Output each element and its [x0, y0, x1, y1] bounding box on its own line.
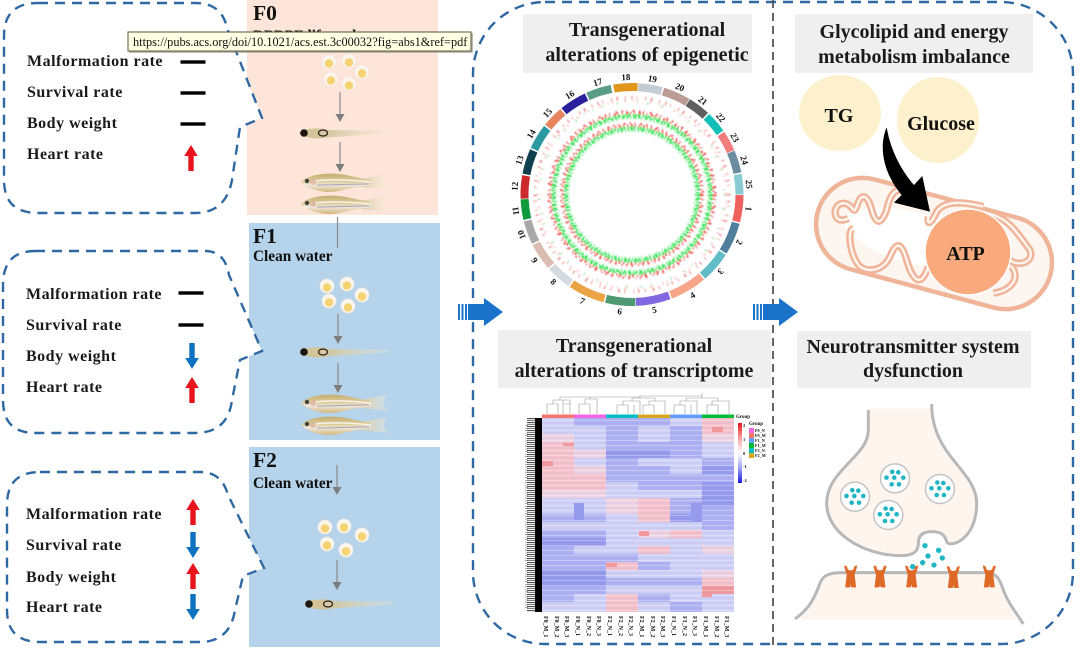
heatmap legend: F2_M: [755, 453, 766, 458]
sample labels: [542, 616, 729, 637]
callout: F0 phenotypes: Malformation rate: [27, 53, 163, 70]
heading: glycolipid: metabolism imbalance: [818, 46, 1010, 68]
sample labels: F0_N_3: [595, 616, 601, 636]
chromosome labels: 20: [674, 81, 686, 94]
chromosome labels: 3: [715, 267, 726, 277]
sample labels: F2_N_2: [617, 616, 623, 636]
inner methylation track: [561, 124, 703, 266]
sample labels: F0_N_2: [585, 616, 591, 636]
heatmap legend: F0_M: [755, 433, 766, 438]
tooltip: URL: https://pubs.acs.org/doi/10.1021/acs.est.3c00032?fig=abs1&ref=pdf: [133, 35, 468, 49]
callout: F2 phenotypes: Heart rate: [26, 599, 103, 616]
heatmap legend: [736, 415, 766, 483]
callout: F1 phenotypes: Malformation rate: [26, 286, 162, 303]
chromosome labels: 25: [744, 179, 754, 190]
heading: glycolipid: [795, 14, 1033, 73]
arrow: generations to epigenetic/transcriptome: [458, 298, 503, 326]
panel: large molecular outcomes container: [473, 2, 1073, 644]
heading: F0: F0: [253, 1, 277, 25]
icon: F2 larva: [304, 599, 393, 609]
middle methylation track: [548, 111, 716, 278]
heatmap legend: F1_N: [755, 438, 765, 443]
chromosome ring: [480, 42, 784, 347]
panel: F0 generation: [247, 0, 438, 215]
postsynaptic membrane: [795, 573, 1023, 624]
presynaptic fill: [827, 408, 977, 556]
chromosome labels: 19: [647, 73, 658, 85]
sample labels: F0_M_2: [553, 616, 559, 637]
chromosome labels: 11: [510, 205, 521, 216]
chart: heatmap: [526, 393, 766, 637]
icon: F2 eggs: [318, 519, 369, 557]
sample labels: F2_N_1: [606, 616, 612, 636]
icon: TG circle: [799, 75, 881, 151]
sample labels: F2_M_3: [659, 616, 665, 637]
chromosome labels: 24: [738, 154, 751, 166]
panel: F1 generation: [249, 217, 440, 440]
icon: F1 larva: [299, 347, 388, 357]
top dendrogram: [547, 393, 729, 414]
heading: neurotransmitter: Neurotransmitter system: [806, 336, 1020, 358]
icon: glucose circle: Glucose: [907, 113, 975, 135]
sample labels: F1_N_1: [670, 616, 676, 636]
heatmap legend: Group: [749, 422, 763, 427]
sample labels: F2_M_1: [638, 616, 644, 637]
arrow: F2 top: [332, 465, 342, 495]
sample labels: F1_N_2: [681, 616, 687, 636]
chromosome labels: 4: [688, 290, 697, 301]
chromosome labels: 12: [509, 181, 520, 191]
icon: F1 eggs: [320, 277, 369, 313]
chromosome labels: 8: [548, 277, 559, 287]
chromosome labels: 21: [696, 94, 710, 108]
arrow: F0 to F1: [336, 217, 338, 248]
callout: F2 phenotypes: [7, 472, 264, 642]
chromosome labels: 22: [714, 111, 728, 124]
heading: transcriptome: alterations of transcriptome: [515, 360, 754, 382]
icon: ATP circle: ATP: [946, 243, 985, 265]
heading: epigenetic: alterations of epigenetic: [545, 44, 749, 66]
callout: F0 phenotypes: Heart rate: [27, 146, 104, 163]
text: F2 clean water: Clean water: [253, 475, 333, 492]
sample labels: F0_M_1: [542, 616, 548, 637]
heading: epigenetic: Transgenerational: [569, 19, 726, 41]
sample labels: F1_N_3: [691, 616, 697, 636]
chromosome labels: 18: [621, 72, 631, 82]
row dendrogram: [526, 418, 542, 612]
arrow: omics to metabolism/neuro: [753, 298, 798, 326]
sparse track: [535, 98, 729, 292]
heading: glycolipid: Glycolipid and energy: [820, 21, 1008, 43]
heading: transcriptome: Transgenerational: [556, 335, 713, 357]
chromosome labels: 5: [651, 304, 658, 315]
chart: circos plot: [480, 42, 784, 347]
sample labels: F1_M_3: [723, 616, 729, 637]
callout: F2 phenotypes: Malformation rate: [26, 506, 162, 523]
heatmap legend: 0: [743, 451, 746, 456]
icon: F0 adult fish: [301, 174, 388, 214]
icon: ATP circle: [925, 209, 1011, 295]
chromosome labels: 7: [578, 296, 587, 307]
heatmap cells: [542, 418, 734, 612]
sample labels: F1_M_2: [713, 616, 719, 637]
icon: TG circle: TG: [825, 105, 854, 127]
heading: F2: F2: [253, 448, 277, 472]
chromosome labels: 13: [514, 154, 526, 166]
callout: F1 phenotypes: Heart rate: [26, 379, 103, 396]
released neurotransmitters: [910, 543, 945, 569]
group colour bar: [542, 414, 734, 418]
icon: F1 adult fish: [301, 395, 388, 435]
chromosome labels: 9: [529, 256, 540, 265]
arrow: F0 larva to adult: [336, 142, 344, 172]
sample labels: F2_M_2: [649, 616, 655, 637]
chromosome labels: 1: [743, 206, 754, 212]
callout: F0 phenotypes: Survival rate: [27, 84, 123, 101]
arrow: F0 eggs to larva: [336, 92, 344, 122]
arrow: F2 eggs to larva: [332, 560, 342, 590]
sample labels: F0_M_3: [563, 616, 569, 637]
heading: F1: F1: [253, 224, 277, 248]
heatmap legend: -2: [743, 478, 747, 483]
panel: F2 generation: [249, 447, 440, 647]
chromosome labels: 2: [734, 238, 745, 247]
text: F0 exposure: DBDPE life cycle exposure: [253, 28, 424, 44]
callout: F0 phenotypes: [4, 3, 262, 213]
chromosome labels: 16: [563, 88, 577, 101]
heatmap legend: 2: [743, 423, 746, 428]
text: F1 clean water: Clean water: [253, 248, 333, 265]
callout: F0 phenotypes: Body weight: [27, 115, 118, 132]
chromosome labels: 6: [617, 306, 623, 317]
receptors: [844, 565, 996, 588]
arrow: F1 eggs to larva: [334, 314, 342, 344]
heatmap legend: Group: [736, 415, 750, 420]
heading: neurotransmitter: [797, 331, 1031, 388]
heatmap legend: F1_M: [755, 443, 766, 448]
vesicles: [840, 464, 954, 529]
arrow: black curved: [883, 127, 930, 212]
chromosome labels: 15: [541, 106, 555, 120]
heatmap legend: 1: [743, 437, 746, 442]
postsynaptic fill: [800, 573, 1017, 620]
heatmap legend: F0_N: [755, 428, 765, 433]
presynaptic terminal: [827, 404, 977, 556]
icon: synapse: [795, 404, 1023, 624]
callout: F2 phenotypes: Body weight: [26, 569, 117, 586]
sample labels: F0_N_1: [574, 616, 580, 636]
chromosome labels: 17: [592, 76, 604, 88]
heatmap legend: F2_N: [755, 448, 765, 453]
heading: epigenetic: [523, 14, 752, 73]
chromosome labels: 10: [515, 228, 528, 241]
sample labels: F2_N_3: [627, 616, 633, 636]
icon: F0 larva: [299, 128, 388, 138]
icon: F0 eggs: [322, 54, 369, 91]
heading: transcriptome: [498, 330, 771, 388]
callout: F2 phenotypes: Survival rate: [26, 537, 122, 554]
sample labels: F1_M_1: [702, 616, 708, 637]
chromosome labels: 23: [728, 131, 742, 144]
callout: F1 phenotypes: Body weight: [26, 348, 117, 365]
callout: F1 phenotypes: [3, 251, 262, 433]
divider line: [772, 0, 774, 645]
heatmap legend: -1: [743, 464, 747, 469]
icon: mitochondrion: [806, 167, 1062, 320]
chromosome labels: 14: [525, 127, 538, 140]
arrow: F1 larva to adult: [334, 363, 342, 393]
tooltip: URL: [128, 32, 473, 53]
icon: glucose circle: [897, 77, 979, 163]
heading: neurotransmitter: dysfunction: [863, 360, 963, 382]
chromosome labels: [509, 72, 754, 317]
callout: F1 phenotypes: Survival rate: [26, 317, 122, 334]
